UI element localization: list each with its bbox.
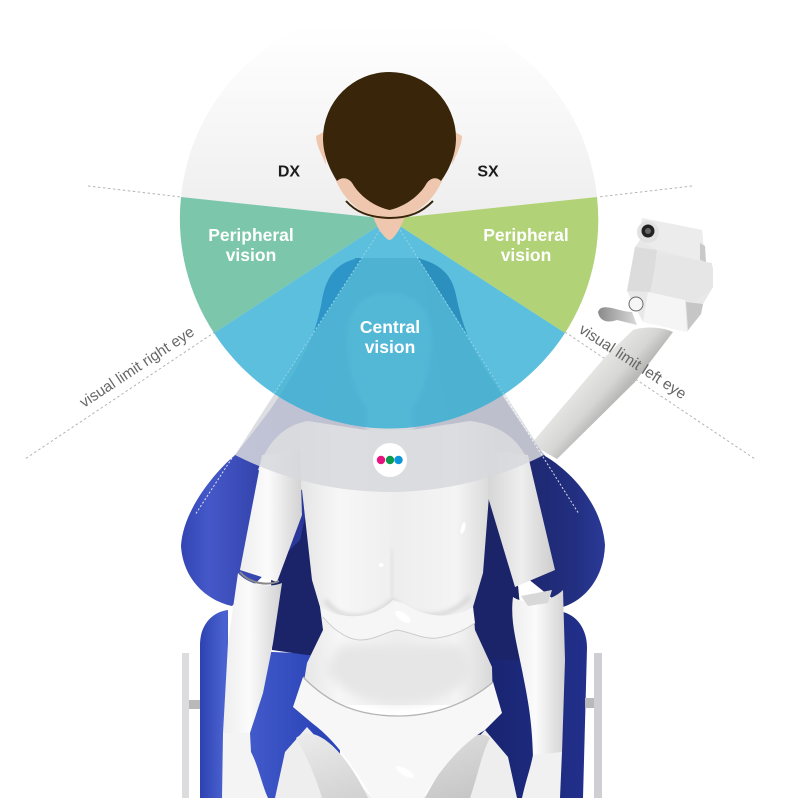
logo badge: [373, 443, 407, 477]
right forearm: [512, 590, 565, 757]
ears: [316, 132, 462, 165]
sector: left peripheral vision: [180, 197, 389, 333]
lamp thumb handle: [598, 307, 637, 325]
label: SX: SX: [477, 164, 499, 180]
label: left peripheral vision: Peripheral: [208, 225, 294, 245]
lower backrest right: [460, 612, 587, 798]
left forearm: [223, 573, 282, 733]
blank strip under cropped image: [0, 798, 800, 800]
left upper arm: [240, 450, 302, 582]
label: right peripheral vision: Peripheral: [483, 225, 569, 245]
label: visual limit right eye: visual limit right eye: [77, 323, 198, 411]
label: left peripheral vision: vision: [226, 245, 276, 265]
lamp lens: [637, 221, 659, 243]
chair: [181, 258, 605, 798]
right hand: [522, 752, 562, 798]
left wrist and hand: [222, 733, 268, 798]
right upper arm: [488, 450, 555, 587]
lamp middle block: [650, 253, 713, 302]
right elbow joint: [521, 590, 552, 606]
central dark seat back: [270, 500, 525, 660]
grey field-of-view fan: [235, 258, 544, 492]
label: DX: DX: [278, 164, 300, 180]
left headrest lobe: [181, 258, 389, 606]
label: central vision: Central: [360, 317, 420, 337]
head seen from above: [316, 72, 462, 240]
vision circle: [180, 8, 598, 429]
hair: [323, 72, 456, 210]
bust shading: [320, 550, 475, 640]
left elbow joint: [240, 572, 279, 584]
headrest centre: [315, 258, 455, 460]
sector: right peripheral vision: [389, 197, 598, 333]
lamp knob: [629, 297, 643, 311]
mannequin head and neck: [347, 293, 431, 432]
fan edge dashes: [195, 230, 579, 515]
thighs: [275, 727, 517, 798]
label: visual limit left eye: visual limit left eye: [576, 321, 689, 403]
lamp side cylinder: [627, 247, 657, 292]
lamp lower block: [643, 292, 687, 332]
hairline shadow: [346, 201, 433, 218]
lamp housing base: [627, 218, 713, 332]
lamp upper block: [640, 218, 705, 262]
dashed limit lines: [25, 186, 755, 459]
limit dashes over central sector: [265, 230, 513, 408]
face and nose: [333, 172, 445, 240]
mannequin: [222, 293, 565, 798]
chair frame rods: [182, 653, 602, 798]
abdomen shading: [325, 645, 475, 704]
lower backrest left: [200, 610, 340, 798]
arm tube: [531, 328, 673, 459]
label: central vision: vision: [365, 337, 415, 357]
torso: [258, 421, 532, 705]
label: right peripheral vision: vision: [501, 245, 551, 265]
glossy highlights: [378, 522, 466, 780]
sector: central vision: [214, 219, 565, 429]
hip band and pelvis: [293, 677, 502, 798]
articulated lamp arm: [531, 218, 713, 459]
sector: upper area behind head: [181, 8, 597, 219]
right headrest lobe: [389, 258, 605, 607]
